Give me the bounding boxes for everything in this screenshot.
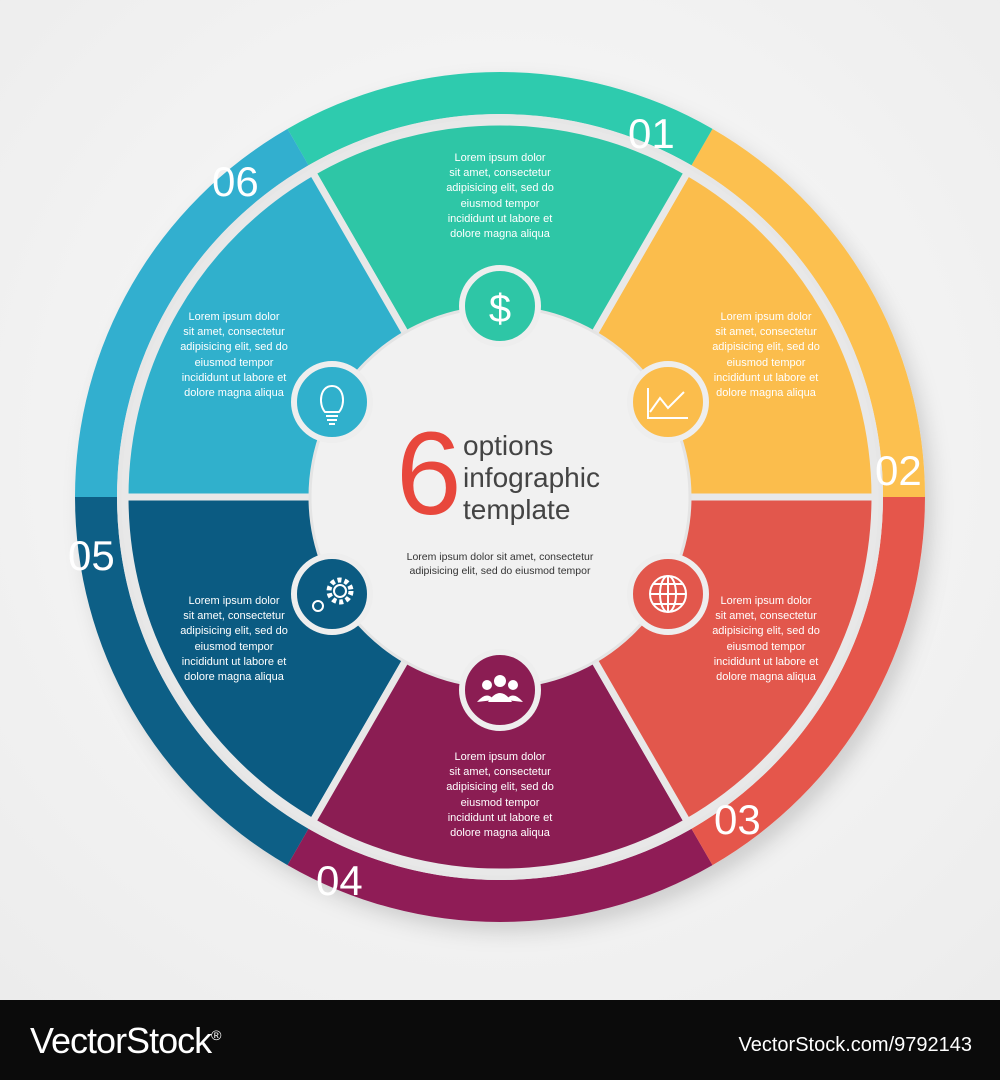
icon: bulb — [321, 386, 343, 424]
text: 04: dolore magna aliqua — [450, 827, 550, 839]
text: 06: Lorem ipsum dolor — [188, 311, 280, 323]
center title: 6 — [396, 408, 462, 540]
icon circles — [294, 268, 706, 728]
text: 01: dolore magna aliqua — [450, 228, 550, 240]
text: 04 — [446, 751, 554, 839]
text: 05: adipisicing elit, sed do — [180, 625, 288, 637]
icon: chart — [648, 388, 688, 418]
text: 04: sit amet, consectetur — [449, 766, 551, 778]
text: 03 — [712, 595, 820, 683]
icon: dollar: $ — [489, 287, 511, 331]
text: 03: Lorem ipsum dolor — [720, 595, 812, 607]
numbers — [68, 110, 922, 904]
text: 02: dolore magna aliqua — [716, 387, 816, 399]
text: 04: eiusmod tempor — [461, 797, 539, 809]
text: 03: adipisicing elit, sed do — [712, 625, 820, 637]
center circle — [310, 307, 690, 687]
text: 04: Lorem ipsum dolor — [454, 751, 546, 763]
text: 02: eiusmod tempor — [727, 357, 805, 369]
background: options — [463, 430, 553, 461]
numbers: 03 — [714, 796, 761, 843]
text: 01: incididunt ut labore et — [448, 213, 552, 225]
icon: globe — [650, 576, 686, 612]
numbers: 02 — [875, 447, 922, 494]
numbers: 04 — [316, 857, 363, 904]
background: infographic — [463, 462, 600, 493]
icon: people — [477, 675, 523, 702]
text: 02: sit amet, consectetur — [715, 326, 817, 338]
text: 03: incididunt ut labore et — [714, 656, 818, 668]
text: 03: sit amet, consectetur — [715, 610, 817, 622]
text: 01 — [446, 152, 554, 240]
icon: gears — [313, 580, 351, 611]
text: 02 — [712, 311, 820, 399]
text: 02: adipisicing elit, sed do — [712, 341, 820, 353]
text: 02: incididunt ut labore et — [714, 372, 818, 384]
text: 02: Lorem ipsum dolor — [720, 311, 812, 323]
text: 06: adipisicing elit, sed do — [180, 341, 288, 353]
text: 01: sit amet, consectetur — [449, 167, 551, 179]
outer ring — [75, 72, 925, 922]
numbers: 01 — [628, 110, 675, 157]
text: 05 — [180, 595, 288, 683]
text: 05: eiusmod tempor — [195, 641, 273, 653]
numbers: 05 — [68, 532, 115, 579]
text: 01: adipisicing elit, sed do — [446, 182, 554, 194]
text: 03: dolore magna aliqua — [716, 671, 816, 683]
text: 03: eiusmod tempor — [727, 641, 805, 653]
footer bar — [0, 1000, 1000, 1080]
background: template — [463, 494, 570, 525]
text: 05: sit amet, consectetur — [183, 610, 285, 622]
text: 06: dolore magna aliqua — [184, 387, 284, 399]
footer logo: VectorStock® — [30, 1020, 220, 1061]
text: 01: Lorem ipsum dolor — [454, 152, 546, 164]
pie sectors — [125, 122, 875, 872]
text: 05: dolore magna aliqua — [184, 671, 284, 683]
text: 01: eiusmod tempor — [461, 198, 539, 210]
text: 05: Lorem ipsum dolor — [188, 595, 280, 607]
text: 04: incididunt ut labore et — [448, 812, 552, 824]
numbers: 06 — [212, 158, 259, 205]
center description: Lorem ipsum dolor sit amet, consectetur adipisicing elit, sed do eiusmod tempor — [407, 551, 593, 577]
text: 06: eiusmod tempor — [195, 357, 273, 369]
text: 05: incididunt ut labore et — [182, 656, 286, 668]
text: 06 — [180, 311, 288, 399]
text: 06: incididunt ut labore et — [182, 372, 286, 384]
text: 04: adipisicing elit, sed do — [446, 781, 554, 793]
text: 06: sit amet, consectetur — [183, 326, 285, 338]
footer url: VectorStock.com/9792143 — [739, 1034, 972, 1056]
